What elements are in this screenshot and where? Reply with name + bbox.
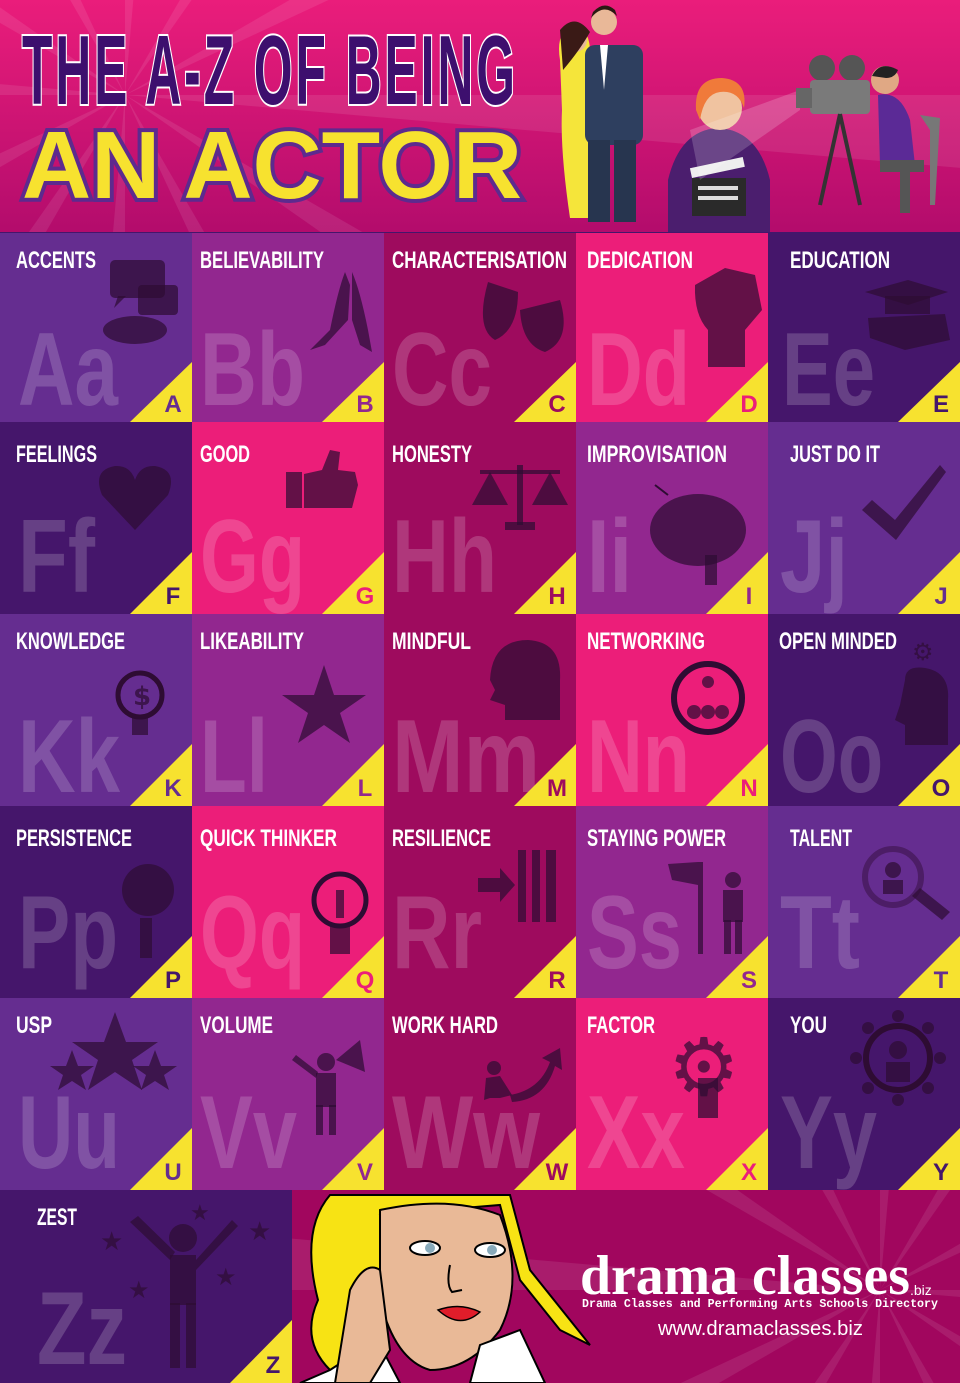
- illustration: couple: [559, 5, 643, 222]
- tile: D dedication: DEDICATION: [587, 247, 693, 274]
- illustration: woman with clapboard: [668, 78, 770, 232]
- icon: brain bomb: [650, 485, 746, 585]
- icon: gear with person: ⚙: [668, 1021, 740, 1114]
- icon: graduation cap on book: [865, 280, 950, 350]
- tile: Z zest: [0, 1190, 292, 1383]
- tile: Y you: YOU: [790, 1012, 827, 1039]
- tile: K knowledge: KNOWLEDGE: [16, 628, 125, 655]
- tile: S staying power: STAYING POWER: [587, 825, 726, 852]
- tile: V volume: V: [357, 1159, 373, 1186]
- tile: V volume: Vv: [200, 1075, 297, 1191]
- tile: M mindful: Mm: [392, 699, 540, 815]
- icon: thumbs up: [286, 450, 358, 508]
- tile: F feelings: [0, 422, 192, 615]
- tile: H honesty: Hh: [392, 499, 497, 615]
- icon: person network: [850, 1010, 946, 1106]
- tile: C characterisation: CHARACTERISATION: [392, 247, 567, 274]
- icon: scales: [472, 465, 568, 530]
- tile: F feelings: FEELINGS: [16, 441, 97, 468]
- icon: light bulb with dollar: $: [133, 682, 151, 712]
- tile: T talent: [768, 806, 960, 998]
- tile: A accents: A: [164, 391, 182, 418]
- tile: Q quick thinker: Q: [356, 967, 374, 994]
- icon: person pulling arrow: [484, 1048, 562, 1102]
- tile: L likeability: LIKEABILITY: [200, 628, 304, 655]
- tile: K knowledge: [0, 614, 192, 815]
- tile: S staying power: [576, 806, 768, 998]
- icon: light bulb with person: [314, 874, 366, 954]
- tile: F feelings: Ff: [18, 499, 95, 615]
- tile: I improvisation: Ii: [587, 499, 632, 615]
- tile: L likeability: Ll: [200, 699, 268, 815]
- icon: stars: [50, 1012, 177, 1090]
- tile: R resilience: [384, 806, 576, 998]
- logo: drama classes: Drama Classes and Performing Arts Schools Directory: [582, 1297, 938, 1311]
- icon: theatre masks: [483, 282, 564, 352]
- logo: drama classes: drama classes: [580, 1245, 910, 1307]
- tile: J just do it: Jj: [780, 499, 848, 615]
- tile: E education: [768, 233, 960, 428]
- tile: M mindful: MINDFUL: [392, 628, 471, 655]
- tile: I improvisation: I: [746, 583, 752, 610]
- tile: M mindful: [384, 614, 576, 815]
- icon: speech bubbles and lips: [103, 260, 178, 344]
- tile: A accents: ACCENTS: [16, 247, 96, 274]
- tile: Q quick thinker: QUICK THINKER: [200, 825, 337, 852]
- tile: X factor: FACTOR: [587, 1012, 655, 1039]
- icon: head with gears: [895, 638, 948, 745]
- tile: Z zest: ZEST: [37, 1204, 77, 1231]
- title line 2: AN ACTOR: [22, 112, 522, 219]
- tile: Y you: Yy: [780, 1075, 877, 1191]
- tile: T talent: TALENT: [790, 825, 852, 852]
- tile: R resilience: RESILIENCE: [392, 825, 491, 852]
- tile: E education: E: [933, 391, 949, 418]
- tile: G good: Gg: [200, 499, 305, 615]
- tile: U usp: U: [164, 1159, 182, 1186]
- icon: heart: [99, 466, 171, 530]
- illustration: pop-art woman: [300, 1195, 590, 1383]
- tile: B believability: BELIEVABILITY: [200, 247, 324, 274]
- illustration: camera operator: [690, 55, 940, 213]
- tile: C characterisation: [384, 233, 576, 428]
- tile: T talent: T: [934, 967, 949, 994]
- footer banner: [292, 1190, 960, 1383]
- tile: B believability: [192, 233, 384, 428]
- icon: person with arms up and stars: ★: [248, 1217, 271, 1247]
- tile: K knowledge: Kk: [18, 699, 120, 815]
- tile: O open minded: [768, 614, 960, 815]
- icon: person with arms up and stars: [100, 1201, 271, 1368]
- website url: www.dramaclasses.biz: [657, 1318, 863, 1340]
- tile: U usp: USP: [16, 1012, 52, 1039]
- icon: person carrying globe: [122, 864, 174, 958]
- tile: O open minded: OPEN MINDED: [779, 628, 897, 655]
- tile: B believability: Bb: [200, 312, 305, 428]
- tile: J just do it: JUST DO IT: [790, 441, 880, 468]
- icon: network globe: [674, 664, 742, 732]
- tile: X factor: [576, 998, 768, 1191]
- icon: person with arms up and stars: ★: [190, 1201, 210, 1226]
- tile: F feelings: F: [166, 583, 180, 610]
- tile: P persistence: P: [165, 967, 181, 994]
- tile: P persistence: Pp: [18, 875, 118, 991]
- header banner: [0, 0, 960, 232]
- icon: checkmark: [862, 465, 946, 540]
- icon: raised fist: [695, 268, 762, 367]
- tile: E education: Ee: [782, 312, 875, 428]
- tile: W work hard: Ww: [392, 1075, 541, 1191]
- tile: G good: [192, 422, 384, 615]
- tile: W work hard: WORK HARD: [392, 1012, 498, 1039]
- tile: S staying power: Ss: [587, 875, 682, 991]
- tile: V volume: VOLUME: [200, 1012, 273, 1039]
- tile: O open minded: O: [932, 775, 950, 802]
- tile: A accents: Aa: [18, 312, 119, 428]
- tile: D dedication: [576, 233, 768, 428]
- tile: U usp: Uu: [18, 1075, 120, 1191]
- tile: L likeability: [192, 614, 384, 815]
- tile: H honesty: HONESTY: [392, 441, 472, 468]
- tile: X factor: X: [741, 1159, 757, 1186]
- tile: N networking: NETWORKING: [587, 628, 705, 655]
- icon: person with arms up and stars: ★: [215, 1263, 237, 1291]
- tile: I improvisation: IMPROVISATION: [587, 441, 727, 468]
- tile: R resilience: Rr: [392, 875, 482, 991]
- tile: Y you: [768, 998, 960, 1191]
- icon: head with gears: ⚙: [912, 638, 934, 666]
- tile: C characterisation: C: [548, 391, 566, 418]
- icon: praying hands: [310, 272, 372, 352]
- tile: T talent: Tt: [780, 875, 860, 991]
- tile: D dedication: Dd: [587, 312, 690, 428]
- tile: J just do it: J: [934, 583, 948, 610]
- logo: drama classes: .biz: [910, 1282, 932, 1298]
- tile: B believability: B: [356, 391, 374, 418]
- icon: arrow into barrier: [478, 850, 556, 922]
- tile: A accents: [0, 233, 192, 428]
- tile: Q quick thinker: [192, 806, 384, 998]
- tile: M mindful: M: [547, 775, 567, 802]
- tile: C characterisation: Cc: [392, 312, 492, 428]
- icon: person with arms up and stars: ★: [128, 1276, 150, 1304]
- tile: G good: G: [356, 583, 374, 610]
- icon: person with arms up and stars: ★: [100, 1227, 123, 1257]
- icon: person with flag: [668, 862, 743, 954]
- icon: head with brain: [490, 640, 560, 720]
- tile: W work hard: W: [546, 1159, 569, 1186]
- tile: Q quick thinker: Qq: [200, 875, 305, 991]
- tile: Y you: Y: [933, 1159, 949, 1186]
- tile: N networking: [576, 614, 768, 815]
- tile: K knowledge: K: [164, 775, 182, 802]
- icon: star: [282, 665, 366, 743]
- tile: U usp: [0, 998, 192, 1191]
- tile: N networking: N: [740, 775, 758, 802]
- tile: N networking: Nn: [587, 699, 690, 815]
- tile: J just do it: [768, 422, 960, 615]
- tile: H honesty: H: [548, 583, 566, 610]
- icon: person with megaphone: [292, 1040, 365, 1135]
- tile: L likeability: L: [358, 775, 372, 802]
- tile: G good: GOOD: [200, 441, 250, 468]
- icon: magnifying glass over person: [865, 849, 950, 920]
- tile: E education: EDUCATION: [790, 247, 890, 274]
- tile: D dedication: D: [740, 391, 758, 418]
- tile: P persistence: PERSISTENCE: [16, 825, 132, 852]
- tile: V volume: [192, 998, 384, 1191]
- tile: Z zest: Z: [266, 1352, 280, 1379]
- tile: R resilience: R: [548, 967, 566, 994]
- tile: P persistence: [0, 806, 192, 998]
- tile: I improvisation: [576, 422, 768, 615]
- tile: H honesty: [384, 422, 576, 615]
- tile: W work hard: [384, 998, 576, 1191]
- tile: S staying power: S: [741, 967, 757, 994]
- tile: X factor: Xx: [587, 1075, 685, 1191]
- tile: O open minded: Oo: [780, 699, 883, 815]
- icon: light bulb with dollar: [118, 673, 162, 735]
